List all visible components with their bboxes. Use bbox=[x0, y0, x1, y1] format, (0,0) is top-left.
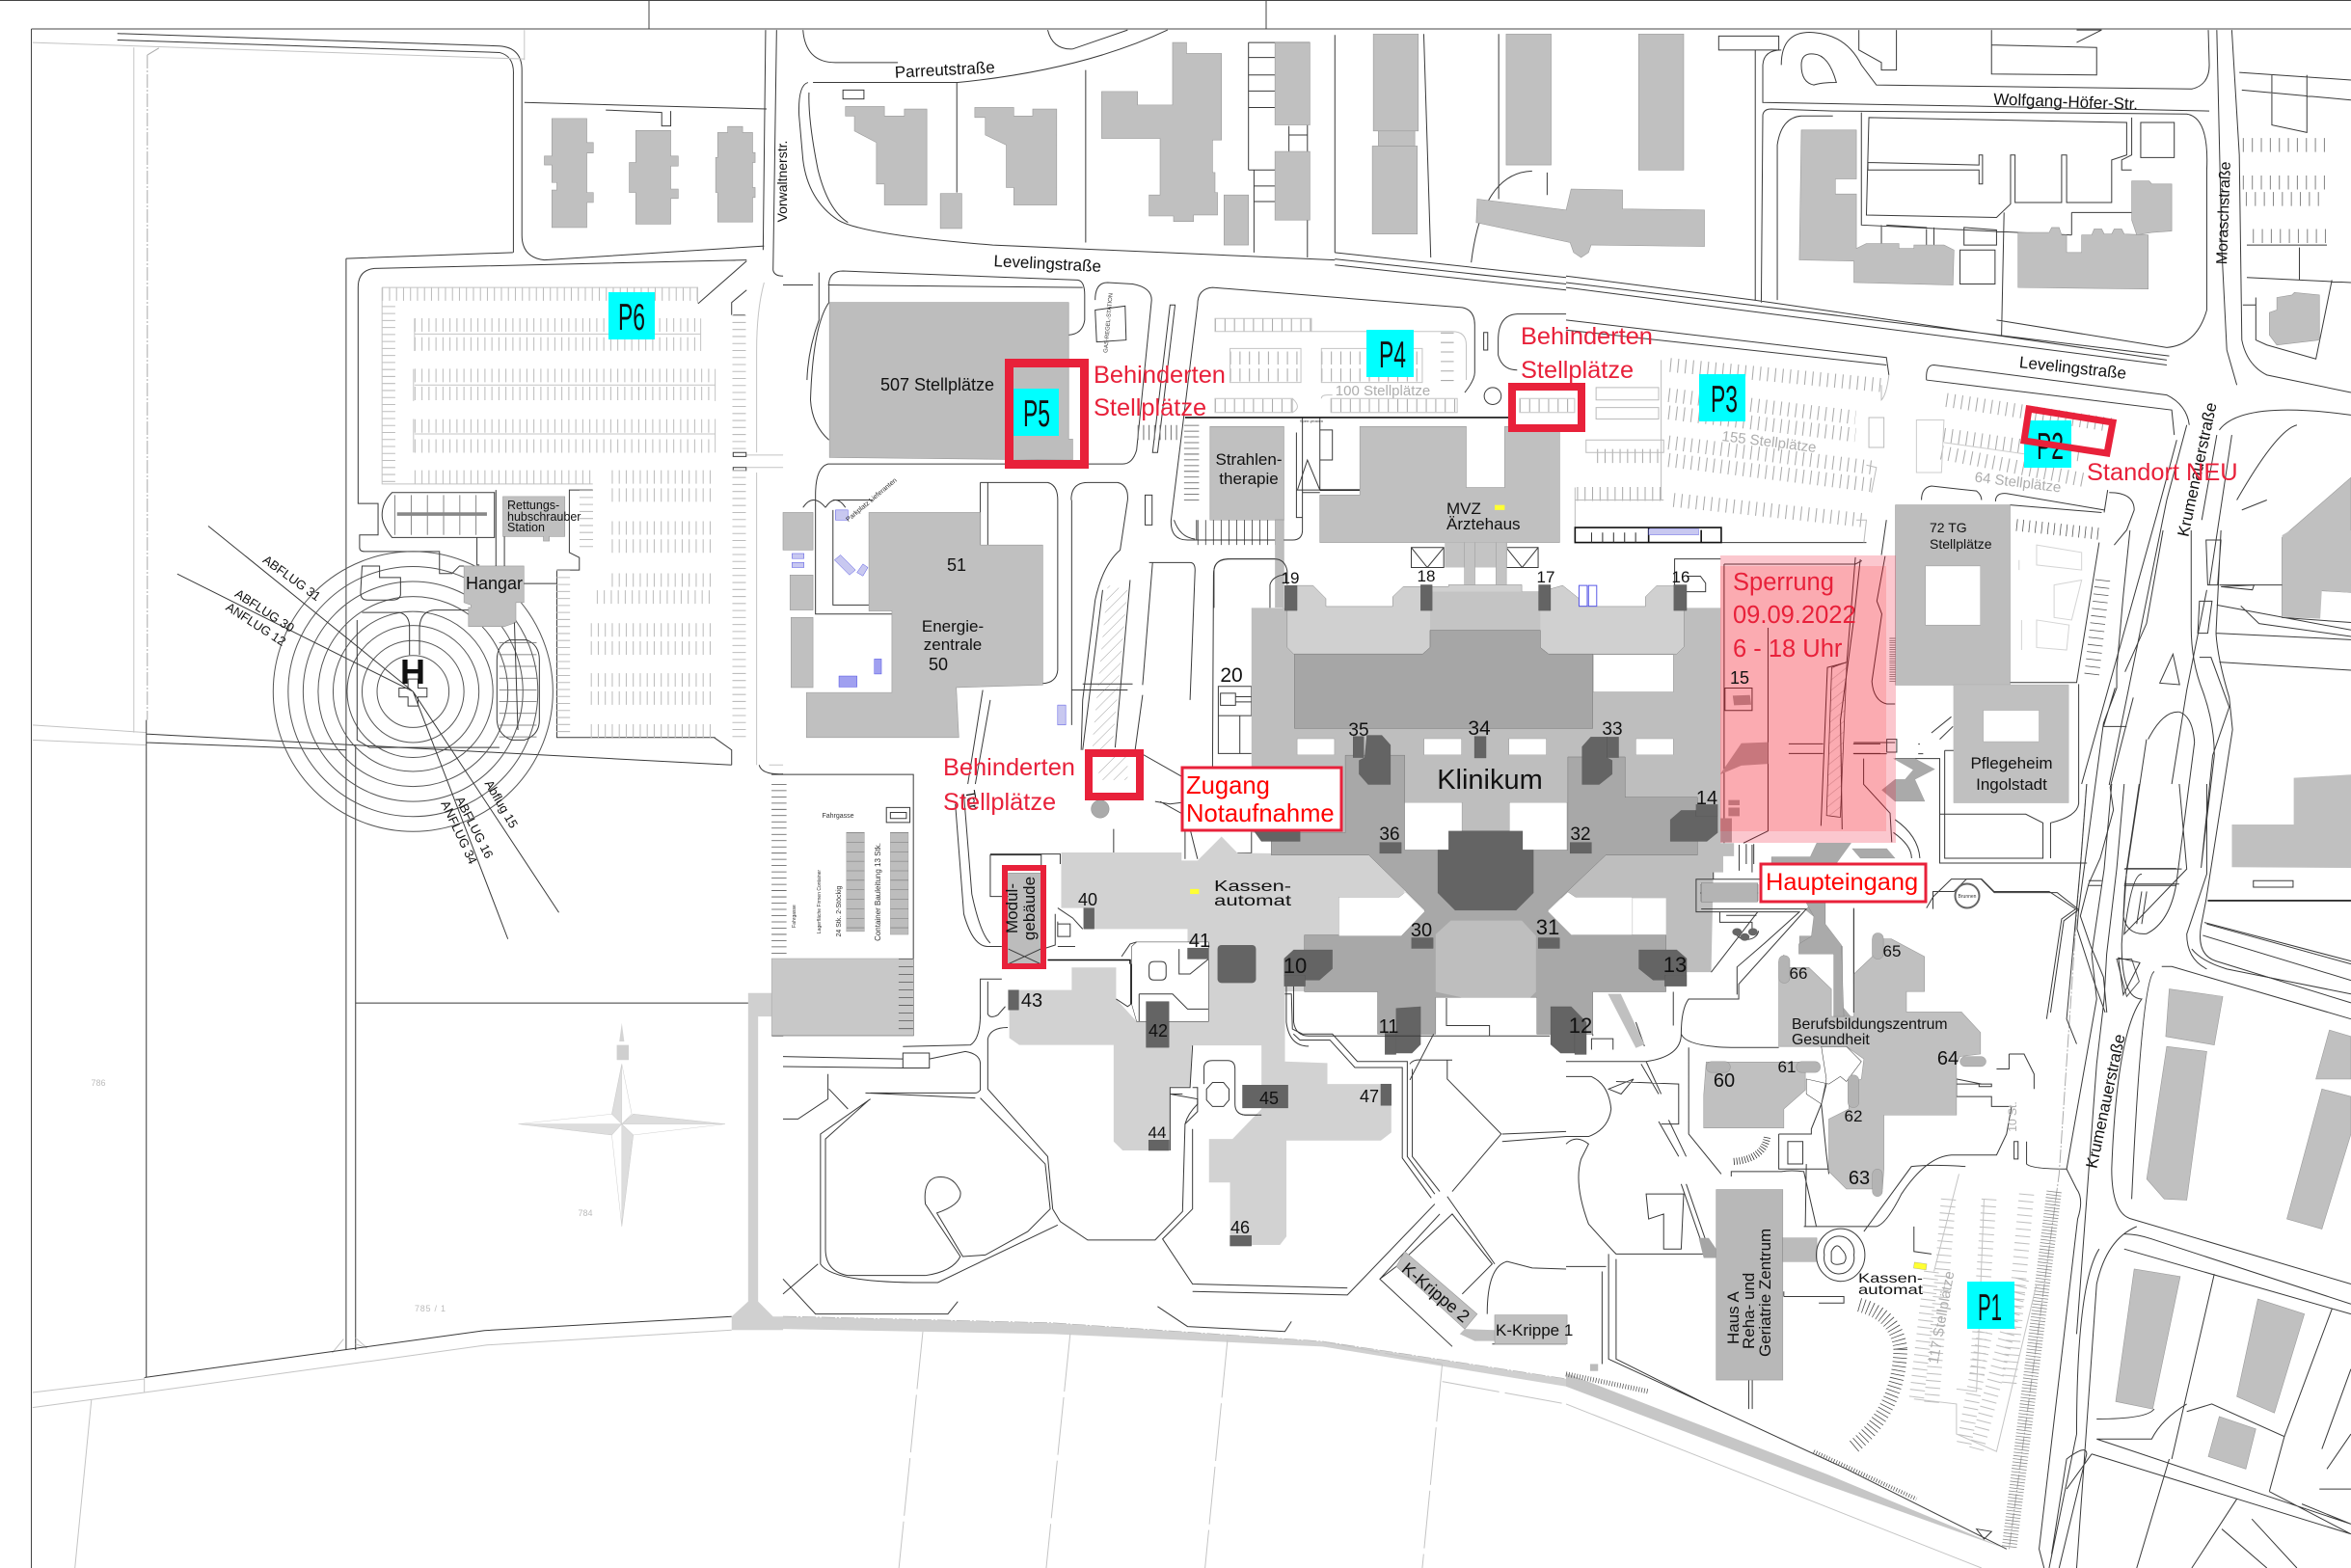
Klinikum door numbers: 44 bbox=[1148, 1123, 1166, 1142]
tiny yard labels: Parkplatz Lieferanten bbox=[845, 477, 899, 524]
P2 parking rows bbox=[1916, 400, 2112, 480]
residential buildings west bbox=[545, 119, 755, 228]
P badge: P6: P6 bbox=[618, 297, 645, 338]
container yard bbox=[771, 774, 913, 1036]
red outline: disabled parking emergency bbox=[1089, 753, 1140, 797]
tree near emergency parking bbox=[1092, 800, 1109, 818]
Klinikum door numbers: 36 bbox=[1379, 825, 1400, 845]
P3 parking rows bbox=[1575, 360, 1889, 543]
north east streets, parking P3 P2 and housing bbox=[1566, 30, 2351, 785]
mid-grey wings bbox=[1271, 755, 1697, 1034]
red note: Behinderten Stellplaetze north: Behinderten bbox=[1521, 323, 1653, 350]
building names: Kassen- bbox=[1214, 879, 1291, 895]
oval parking by helipad bbox=[497, 623, 539, 740]
building names: therapie bbox=[1219, 470, 1279, 488]
P badge: P4 bbox=[1366, 330, 1414, 377]
covered walkway bbox=[1771, 843, 1851, 1020]
red note: Sperrung: 09.09.2022 bbox=[1733, 602, 1856, 629]
street names: Levelingstraße bbox=[2018, 353, 2127, 383]
centre hexagon bbox=[1436, 921, 1536, 997]
stair towers west wing bbox=[1009, 908, 1392, 1246]
Klinikum door numbers: 40 bbox=[1078, 890, 1097, 909]
residential buildings north east bbox=[1638, 34, 2351, 617]
MVZ Aerztehaus building bbox=[1320, 426, 1559, 543]
helipad and station labels: hubschrauber bbox=[507, 510, 581, 524]
Klinikum door numbers: 62 bbox=[1845, 1107, 1862, 1125]
Klinikum door numbers: 15 bbox=[1730, 668, 1749, 688]
building names: automat bbox=[1214, 893, 1292, 909]
helipad and station labels: H bbox=[400, 652, 425, 691]
blue racks bbox=[1579, 585, 1597, 607]
flight path labels: ANFLUG 12 bbox=[224, 600, 288, 649]
west field, helipad and parking P6 bbox=[33, 30, 783, 1377]
Klinikum door numbers: 45 bbox=[1259, 1089, 1279, 1108]
Klinikum door numbers: 42 bbox=[1148, 1021, 1168, 1041]
faint parcel numbers: 785 / 1 bbox=[415, 1304, 446, 1313]
upper wings bbox=[1287, 584, 1684, 654]
callout: Haupteingang: Haupteingang bbox=[1766, 869, 1918, 896]
helipad and station labels bbox=[400, 499, 581, 691]
callout: Zugang Notaufnahme: Zugang bbox=[1186, 772, 1270, 799]
west wing courtyards bbox=[1042, 908, 1261, 1150]
garage building 72 TG bbox=[1896, 505, 2010, 685]
street names bbox=[774, 58, 2234, 1170]
west hospital wing bbox=[1010, 836, 1405, 1245]
building names: automat bbox=[1858, 1282, 1923, 1297]
tiny yard labels: Lagerfläche Firmen Container bbox=[817, 870, 823, 933]
callout: Haupteingang bbox=[1761, 864, 1926, 902]
building names: Modul- bbox=[1003, 883, 1021, 933]
building names: Ärztehaus bbox=[1446, 515, 1521, 533]
Klinikum door numbers: 10 bbox=[1284, 954, 1307, 978]
rescue helicopter station bbox=[503, 497, 565, 541]
building names: Berufsbildungszentrum bbox=[1792, 1016, 1948, 1033]
building names: Haus A bbox=[1724, 1291, 1743, 1344]
P badge: P1: P1 bbox=[1978, 1287, 2002, 1329]
stair landings bbox=[1852, 759, 1934, 858]
Klinikum door numbers: 13 bbox=[1663, 953, 1687, 977]
helipad and station labels: Station bbox=[507, 521, 545, 534]
Klinikum door numbers: 32 bbox=[1570, 825, 1591, 845]
building names: 50 bbox=[929, 655, 948, 674]
flight path labels: ABFLUG 16 bbox=[452, 794, 497, 861]
building names: 72 TG bbox=[1930, 520, 1967, 535]
faint capacity labels: 117 Stellplätze bbox=[1926, 1270, 1958, 1365]
street names: Krumenauerstraße bbox=[2083, 1033, 2129, 1170]
street names: Parreutstraße bbox=[894, 58, 995, 82]
helicopter hangar bbox=[464, 566, 524, 627]
Klinikum door numbers: 16 bbox=[1672, 568, 1689, 586]
tiny yard labels: Fahrgasse bbox=[822, 813, 854, 820]
stair towers and lifts bbox=[1253, 584, 1717, 1055]
covered walkway to BBZ bbox=[1701, 883, 1844, 1016]
Brunnen fountain: Brunnen bbox=[1959, 894, 1977, 900]
P badge: P3: P3 bbox=[1711, 379, 1738, 420]
Haus A bbox=[1716, 1190, 1783, 1380]
Klinikum south west wing and grounds bbox=[771, 774, 1567, 1568]
building names: K-Krippe 1 bbox=[1496, 1321, 1573, 1339]
kassen wing overlap bbox=[1271, 854, 1405, 936]
tiny yard labels: Fahrgasse bbox=[792, 905, 797, 928]
Klinikum door numbers bbox=[1021, 567, 1959, 1237]
southern boundary strip bbox=[783, 1316, 1566, 1387]
red outline: Modulgebaeude bbox=[1005, 868, 1043, 966]
compass rose bbox=[519, 1023, 725, 1227]
red outline: disabled parking north bbox=[1512, 387, 1581, 428]
body bbox=[1252, 608, 1734, 972]
Klinikum door numbers: 41 bbox=[1189, 931, 1210, 952]
building names: 507 Stellplätze bbox=[880, 375, 994, 394]
Sperrung closure overlay bbox=[1720, 555, 1896, 843]
red note: Behinderten Stellplaetze P5: Behinderten bbox=[1094, 362, 1226, 389]
P badge: P3 bbox=[1699, 374, 1745, 421]
flight path labels bbox=[224, 553, 521, 866]
emergency ramp bbox=[1083, 580, 1130, 780]
north streets and buildings bbox=[783, 30, 1705, 784]
red note: Behinderten Stellplaetze emergency: Behinderten bbox=[943, 754, 1075, 781]
building names: 51 bbox=[947, 555, 966, 575]
red note: Standort NEU: Standort NEU bbox=[2087, 459, 2238, 486]
building names: Kassen- bbox=[1858, 1270, 1923, 1285]
garage ramp ticks bbox=[2016, 525, 2102, 676]
Klinikum door numbers: 63 bbox=[1849, 1168, 1870, 1189]
south east campus and Krumenauerstrasse bbox=[1566, 784, 2351, 1568]
Modulgebaeude bbox=[1009, 873, 1040, 964]
red note: Sperrung: Sperrung bbox=[1733, 569, 1834, 596]
P badge: P4: P4 bbox=[1379, 335, 1406, 376]
P3 bicycle shelter bbox=[1575, 527, 1721, 543]
helipad circles bbox=[177, 526, 559, 939]
Klinikum door numbers: 64 bbox=[1937, 1048, 1959, 1069]
building names: gebäude bbox=[1020, 877, 1039, 940]
faint parcel numbers: 784 bbox=[578, 1208, 593, 1218]
building names: Strahlen- bbox=[1216, 450, 1282, 469]
flight path labels: Abflug 15 bbox=[482, 777, 521, 830]
Klinikum door numbers: 17 bbox=[1537, 568, 1554, 586]
building names: zentrale bbox=[924, 635, 982, 654]
Strahlentherapie building bbox=[1210, 426, 1284, 520]
building names: Klinikum bbox=[1437, 765, 1543, 796]
Sperrung roads bbox=[1841, 556, 1897, 842]
Berufsbildungszentrum bbox=[1779, 939, 1981, 1189]
building names: MVZ bbox=[1446, 500, 1481, 518]
south boundary strip east bbox=[1566, 1373, 2007, 1549]
red note: Sperrung: 6 - 18 Uhr bbox=[1733, 635, 1843, 662]
lower courtyard lines bbox=[1286, 987, 1673, 1080]
building names: Ingolstadt bbox=[1976, 775, 2047, 794]
red outline: P2 new location bbox=[2024, 409, 2113, 453]
south field and compass bbox=[33, 959, 783, 1568]
light wells bbox=[1297, 655, 1673, 936]
crosswalk bbox=[1138, 419, 1180, 447]
Klinikum door numbers: 14 bbox=[1696, 788, 1717, 809]
central courtyard block bbox=[1294, 631, 1593, 728]
Pflegeheim and east junction bbox=[1841, 530, 2351, 1013]
Klinikum door numbers: 66 bbox=[1790, 964, 1807, 983]
P badge: P2 bbox=[2024, 420, 2071, 468]
Klinikum door numbers: 18 bbox=[1418, 567, 1435, 585]
flight path labels: ANFLUG 34 bbox=[438, 798, 480, 866]
blue technical units bbox=[792, 510, 1066, 725]
Klinikum door numbers: 60 bbox=[1714, 1070, 1735, 1092]
building names: Pflegeheim bbox=[1970, 754, 2053, 772]
red outline: P5 disabled parking bbox=[1009, 363, 1084, 465]
building names: Energie- bbox=[922, 617, 984, 635]
red note: Behinderten Stellplaetze emergency: Stellplätze bbox=[943, 789, 1056, 816]
tiny yard labels bbox=[792, 293, 1323, 941]
building names: Reha- und bbox=[1740, 1273, 1758, 1349]
helipad and station labels: Hangar bbox=[466, 574, 523, 593]
building names bbox=[880, 375, 2053, 1357]
faint parcel numbers: 786 bbox=[91, 1078, 106, 1088]
bus parking bbox=[382, 490, 556, 583]
Parkplatz Lieferanten bbox=[803, 500, 846, 507]
street names: Tor bbox=[962, 789, 982, 810]
P badge: P2: P2 bbox=[2037, 426, 2064, 468]
Brunnen fountain bbox=[1956, 883, 1979, 908]
main entrance canopy bbox=[1696, 873, 1799, 994]
Klinikum door numbers: 47 bbox=[1360, 1087, 1379, 1106]
stair ramp bbox=[1734, 1137, 1768, 1161]
red note: Behinderten Stellplaetze P5: Stellplätze bbox=[1094, 394, 1206, 421]
flight path labels: ABFLUG 31 bbox=[260, 553, 323, 604]
Kinderkrippe buildings bbox=[1396, 1252, 1567, 1344]
Klinikum door numbers: 33 bbox=[1602, 719, 1623, 740]
tiny yard labels: 24 Stk. 2-Stöckig bbox=[836, 885, 843, 936]
building names: Gesundheit bbox=[1792, 1032, 1870, 1048]
energy centre bbox=[806, 512, 1042, 738]
P badge: P5: P5 bbox=[1023, 393, 1050, 435]
residential buildings north bbox=[843, 34, 1705, 257]
entrance canopies bbox=[1412, 543, 1538, 587]
Klinikum door numbers: 35 bbox=[1348, 720, 1369, 741]
tiny yard labels: Sperr-pfosten bbox=[1300, 419, 1323, 423]
Klinikum door numbers: 65 bbox=[1883, 942, 1901, 960]
Klinikum door numbers: 12 bbox=[1569, 1014, 1592, 1038]
callout: Zugang Notaufnahme bbox=[1182, 768, 1341, 830]
faint capacity labels: 64 Stellplätze bbox=[1974, 470, 2062, 496]
faint capacity labels bbox=[1336, 383, 2062, 1365]
Klinikum door numbers: 46 bbox=[1230, 1218, 1250, 1237]
faint capacity labels: 100 Stellplätze bbox=[1336, 383, 1430, 399]
faint capacity labels: 10 St. bbox=[2006, 1101, 2019, 1132]
callout: Zugang Notaufnahme: Notaufnahme bbox=[1186, 800, 1335, 827]
street names: Krumenauerstraße bbox=[2175, 401, 2221, 538]
gas regulator station bbox=[1095, 306, 1126, 342]
street names: Levelingstraße bbox=[993, 252, 1101, 276]
building names: Stellplätze bbox=[1930, 536, 1992, 552]
red note: Behinderten Stellplaetze north: Stellplätze bbox=[1521, 357, 1634, 384]
Klinikum door numbers: 34 bbox=[1468, 717, 1491, 740]
Klinikum main building bbox=[1214, 559, 1851, 1080]
BBZ stair wings bbox=[1706, 933, 1986, 1197]
P1 parking rows bbox=[1853, 1174, 2054, 1549]
Klinikum door numbers: 11 bbox=[1379, 1016, 1398, 1038]
Klinikum door numbers: 31 bbox=[1536, 915, 1559, 939]
faint parcel numbers bbox=[91, 1078, 593, 1313]
Strahlentherapie ramp bbox=[1175, 425, 1284, 610]
street names: Vorwaltnerstr. bbox=[774, 141, 790, 222]
P4 parking rows bbox=[1214, 318, 1575, 413]
P5 parking deck bbox=[829, 303, 1072, 460]
street names: Wolfgang-Höfer-Str. bbox=[1993, 90, 2138, 114]
Klinikum door numbers: 19 bbox=[1282, 569, 1299, 587]
P badge: P6 bbox=[608, 292, 655, 339]
P badge: P1 bbox=[1967, 1282, 2014, 1329]
street names: Moraschstraße bbox=[2214, 161, 2234, 264]
tiny yard labels: GAS-REGEL-STATION bbox=[1103, 293, 1115, 353]
helipad and station labels: Rettungs- bbox=[507, 499, 559, 512]
Klinikum door numbers: 20 bbox=[1220, 664, 1243, 687]
Klinikum door numbers: 30 bbox=[1411, 920, 1432, 941]
faint capacity labels: 155 Stellplätze bbox=[1721, 428, 1817, 456]
Klinikum door numbers: 43 bbox=[1021, 990, 1042, 1012]
P badge: P5 bbox=[1013, 389, 1059, 436]
Klinikum door numbers: 61 bbox=[1778, 1058, 1796, 1076]
building names: Geriatrie Zentrum bbox=[1756, 1229, 1774, 1357]
Sperrung road lines bbox=[1720, 557, 1880, 843]
building names: K-Krippe 2 bbox=[1398, 1258, 1473, 1326]
tiny yard labels: Container Bauleitung 13 Stk. bbox=[874, 843, 882, 941]
flight path labels: ABFLUG 30 bbox=[232, 586, 297, 635]
right housing bbox=[2116, 989, 2351, 1469]
